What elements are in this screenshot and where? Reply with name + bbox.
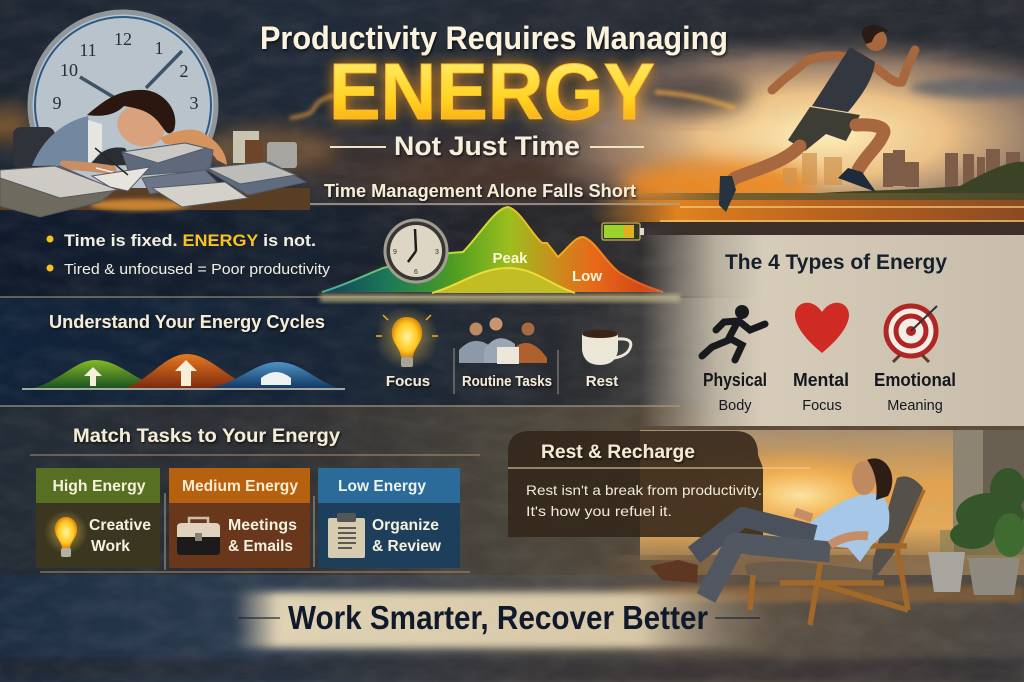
label: mental — [793, 370, 849, 414]
chart: energy curve with peak and low: Low — [572, 268, 602, 285]
heading: match tasks: Match Tasks to Your Energy — [73, 426, 340, 447]
panel: rest and recharge — [508, 431, 810, 537]
icon: coffee cup — [582, 330, 631, 365]
illustration: wall clock: 2 — [180, 61, 188, 81]
card: medium energy: Meetings — [228, 517, 297, 534]
text block: time vs energy bullets — [46, 231, 331, 278]
icon: target — [886, 306, 937, 362]
label: rest: Rest — [586, 373, 618, 390]
illustration: window and plants — [928, 430, 1024, 595]
label: emotional: Emotional — [874, 370, 956, 390]
panel: the 4 types of energy — [640, 235, 1024, 426]
panel: match tasks — [30, 426, 480, 572]
label: mental: Mental — [793, 370, 849, 390]
illustration: wall clock: 1 — [154, 38, 164, 58]
chart: energy curve with peak and low — [320, 207, 680, 302]
icon: pocket clock: 6 — [414, 269, 418, 276]
card: low energy: Organize — [372, 517, 439, 534]
label: focus: Focus — [386, 373, 430, 390]
illustration: wall clock: 9 — [52, 93, 62, 113]
icon: pocket clock: 3 — [435, 249, 439, 256]
label: physical — [703, 370, 767, 414]
icon: pocket clock — [385, 220, 447, 282]
text block: rest message — [526, 482, 762, 519]
card: low energy — [318, 468, 460, 568]
title: ENERGY — [329, 47, 655, 136]
footer tagline: Work Smarter, Recover Better — [288, 599, 708, 636]
illustration: sprinting man — [719, 25, 915, 212]
illustration: wall clock — [30, 12, 216, 198]
label: physical: Physical — [703, 370, 767, 390]
illustration: relaxing man in chair — [650, 458, 924, 625]
subheading: time management: Time Management Alone Falls Short — [324, 181, 636, 201]
illustration: wall clock: 12 — [114, 29, 132, 49]
label: emotional — [874, 370, 956, 414]
card: medium energy: Medium Energy — [182, 478, 298, 495]
illustration: tired woman at desk — [0, 90, 310, 217]
panel: energy cycles — [0, 296, 680, 407]
card: high energy — [36, 468, 160, 568]
text block: time vs energy bullets: Time is fixed. ENERGY is not. — [64, 231, 316, 250]
icon: running figure — [702, 306, 765, 360]
heading: 4 types: The 4 Types of Energy — [725, 251, 947, 274]
text block: time vs energy bullets: Tired & unfocused = Poor productivity — [64, 261, 331, 278]
heading: rest and recharge: Rest & Recharge — [541, 441, 695, 463]
card: high energy: Creative — [89, 517, 151, 534]
card: high energy: Work — [91, 538, 130, 555]
icon: light bulb — [375, 306, 439, 370]
chart: three waves — [22, 354, 345, 389]
icon: team meeting — [459, 318, 547, 364]
title: Not Just Time — [394, 131, 580, 161]
card: medium energy: & Emails — [228, 538, 293, 555]
label: mental: Focus — [802, 398, 842, 414]
illustration: wall clock: 11 — [79, 40, 97, 60]
title: ENERGY — [329, 47, 655, 136]
icon: heart — [795, 303, 849, 353]
card: medium energy — [169, 468, 310, 568]
label: emotional: Meaning — [887, 398, 943, 414]
text block: rest message: Rest isn't a break from productivity. — [526, 482, 762, 498]
illustration: skyline and running track — [0, 92, 1024, 235]
title: Productivity Requires Managing — [260, 20, 728, 56]
chart: energy curve with peak and low: Peak — [492, 250, 528, 267]
card: high energy: High Energy — [52, 478, 146, 495]
card: low energy: Low Energy — [338, 478, 426, 495]
text block: rest message: It's how you refuel it. — [526, 503, 672, 519]
label: routine tasks: Routine Tasks — [462, 374, 552, 390]
heading: cycles: Understand Your Energy Cycles — [49, 311, 325, 332]
label: physical: Body — [718, 398, 752, 414]
illustration: wall clock: 10 — [60, 60, 78, 80]
card: low energy: & Review — [372, 538, 442, 555]
icon: battery — [602, 223, 644, 240]
illustration: wall clock: 3 — [190, 93, 198, 113]
title — [260, 20, 728, 161]
icon: pocket clock: 9 — [393, 249, 397, 256]
